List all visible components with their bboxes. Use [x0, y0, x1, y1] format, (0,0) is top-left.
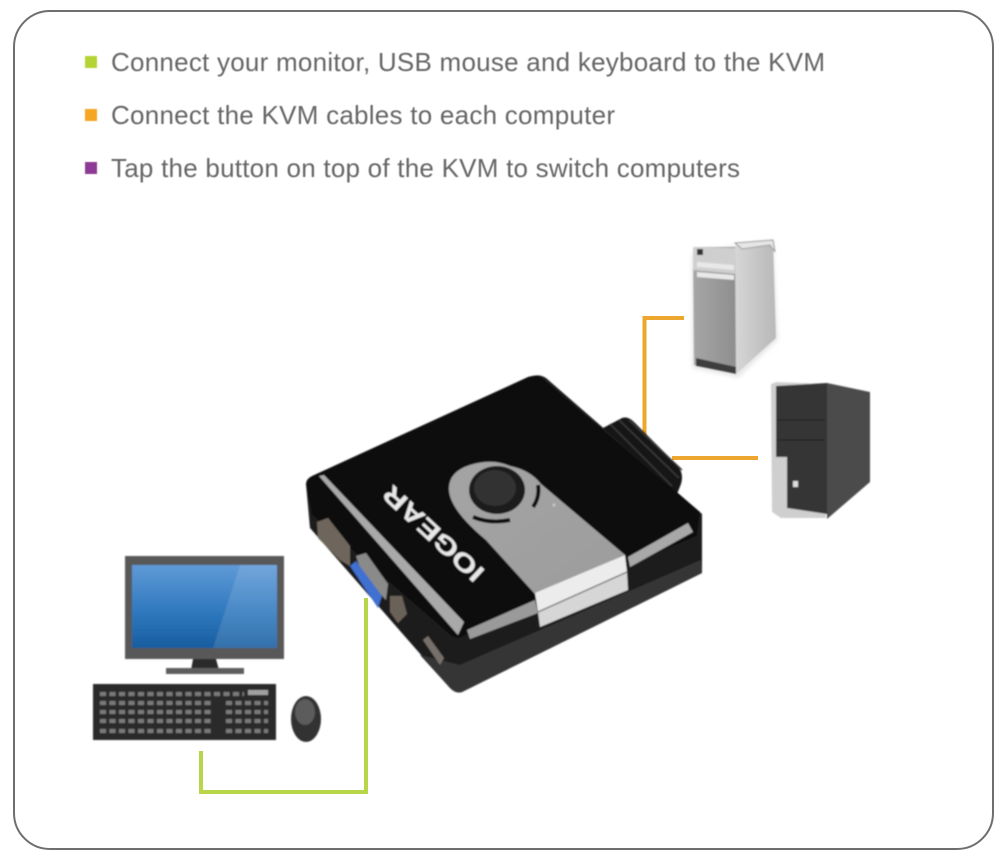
- icon: Mac Pro tower: [692, 240, 778, 378]
- icon: keyboard: [93, 684, 276, 740]
- ports on left face: [317, 518, 407, 623]
- KVM switch device: [306, 375, 702, 692]
- chrome trim left: [467, 600, 538, 639]
- rear cable strain relief: [603, 418, 682, 494]
- status LEDs: [552, 504, 556, 506]
- brand logo: IOGEAR: [377, 479, 490, 587]
- green cable from KVM to keyboard: [201, 598, 366, 792]
- icon: black PC tower: [771, 382, 870, 519]
- bullet: tap button: Tap the button on top of the KVM to switch computers: [111, 153, 740, 183]
- side highlight strip: [319, 475, 464, 635]
- USB port: [423, 636, 444, 665]
- icon: monitor: [125, 556, 284, 674]
- plate front band: [535, 555, 627, 612]
- orange cable to Mac tower: [644, 318, 684, 436]
- bullet: connect monitor: Connect your monitor, USB mouse and keyboard to the KVM: [111, 47, 825, 77]
- bullet list: [85, 47, 825, 183]
- button arc marks: [473, 485, 538, 521]
- bullet: connect cables: Connect the KVM cables to each computer: [111, 100, 615, 130]
- lower body: [306, 375, 702, 692]
- chrome trim right: [628, 523, 693, 567]
- orange cable to PC tower: [672, 456, 758, 460]
- silver plate with button: [449, 462, 628, 627]
- round push button: [469, 466, 525, 514]
- icon: mouse: [291, 696, 321, 742]
- top surface: [306, 376, 700, 638]
